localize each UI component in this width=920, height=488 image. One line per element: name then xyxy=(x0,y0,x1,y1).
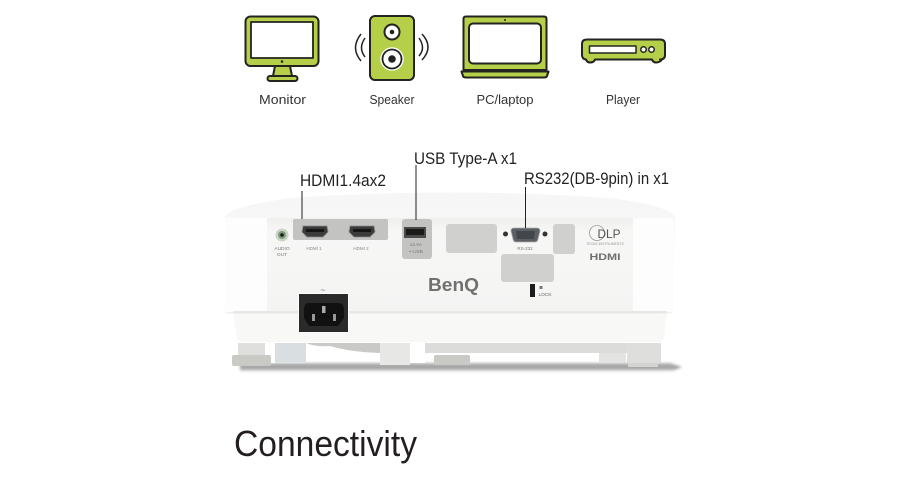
title: Connectivity xyxy=(234,423,417,464)
RS232 port: RS-232 xyxy=(517,246,533,251)
BenQ logo: BenQ xyxy=(428,275,479,295)
side columns xyxy=(225,218,267,312)
USB port: ⇠USB xyxy=(409,249,423,255)
upper shell xyxy=(225,192,675,314)
HDMI highlight panel xyxy=(293,219,388,240)
foot: block right xyxy=(599,353,626,363)
icon: speaker xyxy=(356,16,428,80)
rear recessed panel xyxy=(267,218,633,311)
callout: HDMI: HDMI1.4ax2 xyxy=(300,171,386,190)
grey label area right xyxy=(553,224,575,254)
HDMI logo: HDMI xyxy=(590,252,620,262)
icon: laptop xyxy=(462,16,548,78)
HDMI 2 port xyxy=(349,226,375,251)
grey label area left xyxy=(446,224,497,253)
foot: front left xyxy=(232,343,271,366)
foot: block centre xyxy=(380,343,410,365)
label: Speaker: Speaker xyxy=(370,92,415,107)
projector rear view xyxy=(225,192,682,372)
grey label area centre xyxy=(501,254,554,282)
floor shadow xyxy=(240,363,682,372)
audio out jack: OUT xyxy=(277,252,287,258)
HDMI 1 port xyxy=(302,226,328,251)
USB highlight panel xyxy=(402,219,432,259)
foot: block left xyxy=(275,343,306,362)
HDMI 1 port: HDMI 1 xyxy=(306,246,322,251)
underside band xyxy=(265,343,627,363)
icon: monitor xyxy=(246,16,318,81)
foot: right xyxy=(627,343,661,367)
label: Monitor: Monitor xyxy=(259,92,307,107)
USB port xyxy=(404,227,426,255)
AC power socket xyxy=(298,285,349,333)
RS232 port xyxy=(503,228,548,251)
callout: HDMI xyxy=(300,171,386,219)
callout: USB: USB Type-A x1 xyxy=(414,149,517,168)
USB port: ≤1.5A xyxy=(410,242,422,247)
audio out jack xyxy=(274,228,290,258)
kensington lock xyxy=(530,284,552,298)
DLP logo: TEXAS INSTRUMENTS xyxy=(586,242,625,246)
foot: centre adjuster xyxy=(434,355,470,365)
audio out jack: AUDIO xyxy=(274,246,290,252)
callout: USB xyxy=(414,149,517,220)
DLP logo: DLP xyxy=(598,227,620,241)
icon: player xyxy=(582,40,665,62)
HDMI 2 port: HDMI 2 xyxy=(353,246,369,251)
kensington lock: LOCK xyxy=(538,292,552,298)
label: Player: Player xyxy=(606,92,641,107)
callout: RS232: RS232(DB-9pin) in x1 xyxy=(524,169,669,188)
label: PC/laptop: PC/laptop xyxy=(476,92,534,107)
lower body xyxy=(233,313,667,342)
AC power socket: ~ xyxy=(320,285,326,295)
DLP logo xyxy=(586,226,625,246)
